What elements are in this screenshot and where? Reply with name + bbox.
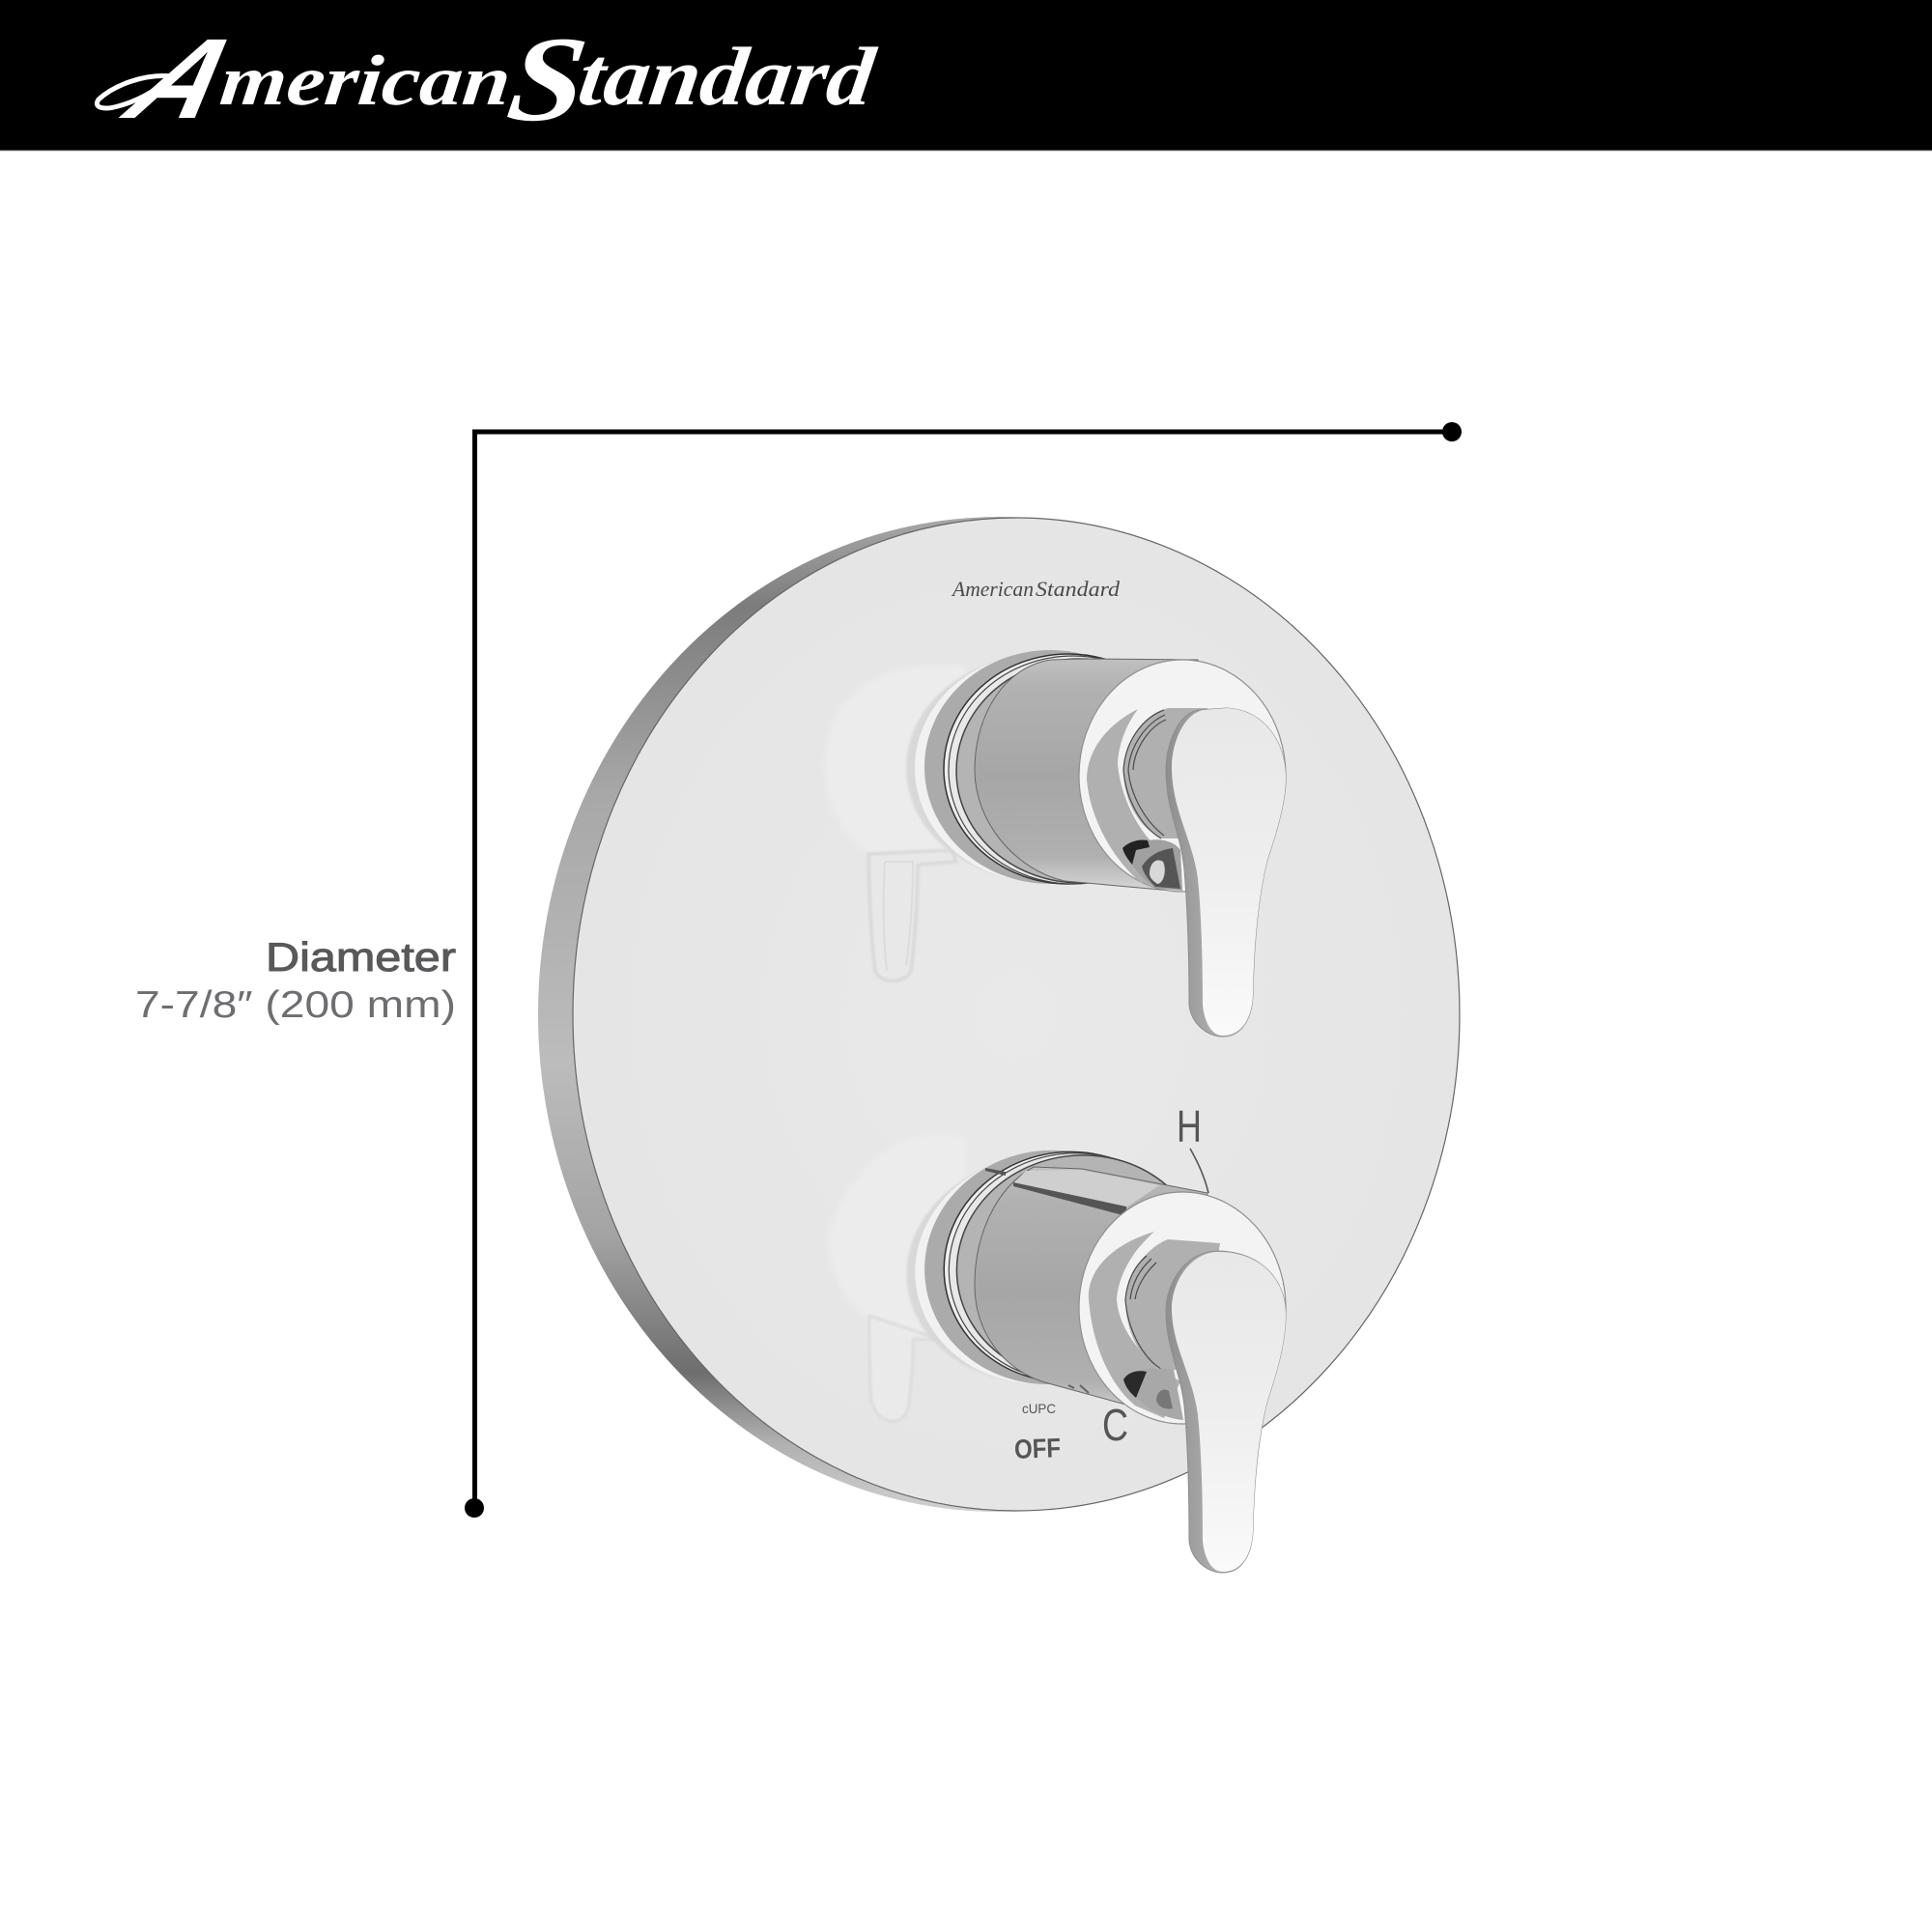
engraved marks: [1068, 1385, 1089, 1393]
plate logo text: [951, 577, 1121, 601]
lower handle: [893, 1132, 1286, 1573]
brand logo: A: [103, 15, 262, 143]
lever lug: [1122, 839, 1182, 891]
engraved cold label: C: [1102, 1400, 1128, 1450]
upper handle: [906, 650, 1286, 1037]
ring base: [893, 1132, 1217, 1401]
barrel: [975, 1167, 1208, 1420]
stem: [1125, 1239, 1220, 1370]
diameter label: [135, 934, 456, 1026]
certification label: cUPC: [1022, 1401, 1056, 1416]
diameter label: Diameter: [266, 934, 456, 980]
brand logo: [97, 13, 882, 147]
stem: [1123, 708, 1208, 838]
lower handle reflection: [828, 1134, 966, 1421]
plate face: [573, 518, 1460, 1511]
header bar: [0, 0, 1932, 151]
plate logo text: American: [951, 577, 1034, 601]
escutcheon disc: [1079, 1192, 1286, 1424]
lever: [1166, 708, 1286, 1037]
plate logo text: Standard: [1036, 577, 1121, 601]
brand logo: S: [500, 13, 595, 147]
brand logo: tandard: [573, 30, 882, 123]
barrel highlight stripe: [985, 1168, 1159, 1216]
trim plate: [538, 517, 1460, 1512]
engraved hot label: H: [1177, 1101, 1202, 1151]
barrel: [975, 659, 1198, 892]
dimension bracket: [465, 422, 1462, 1518]
lever: [1166, 1251, 1286, 1573]
ring base: [906, 650, 1204, 884]
escutcheon disc: [1079, 660, 1286, 892]
engraved hot label: [1177, 1101, 1208, 1193]
inner crescent: [1089, 1232, 1180, 1418]
off label: OFF: [1013, 1433, 1062, 1464]
inner crescent: [1087, 709, 1180, 889]
lever lug: [1123, 1368, 1183, 1420]
plate edge: [538, 517, 1460, 1512]
brand logo: merican: [216, 42, 515, 121]
diameter label: 7-7/8″ (200 mm): [135, 984, 456, 1026]
upper handle reflection: [825, 665, 966, 981]
